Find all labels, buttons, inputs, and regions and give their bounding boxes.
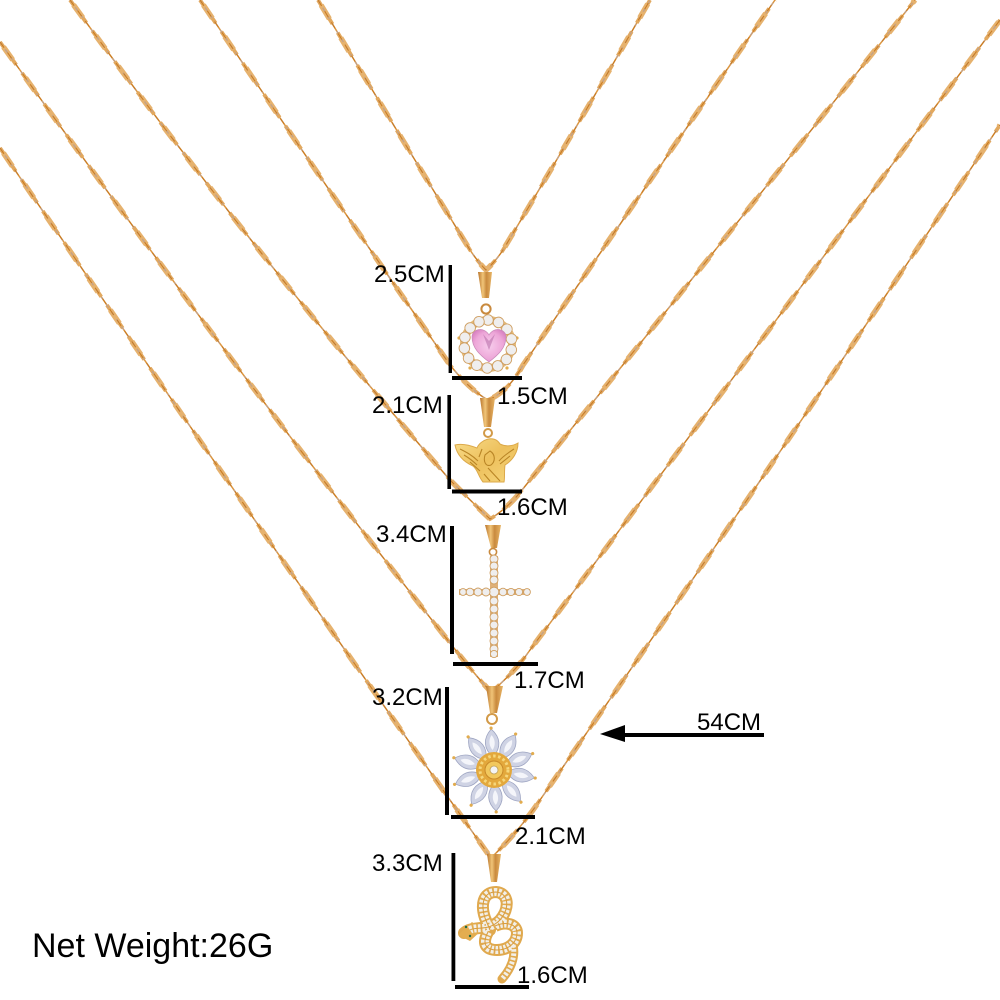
pendant: pink heart with halo bbox=[457, 272, 519, 373]
arrow: chain length 54CM bbox=[600, 709, 764, 742]
dimension: snake height: 3.3CM bbox=[372, 850, 443, 877]
dimension: sunflower height bbox=[372, 684, 449, 815]
dimension: heart height: 2.5CM bbox=[374, 261, 445, 288]
dimension: angel width: 1.6CM bbox=[497, 494, 568, 521]
dimension: heart width bbox=[452, 376, 568, 410]
dimension: angel height: 2.1CM bbox=[372, 392, 443, 419]
dimension: cross height: 3.4CM bbox=[376, 521, 447, 548]
chain 3 bbox=[70, 0, 915, 519]
dimension: sunflower width bbox=[451, 815, 586, 850]
dimension: cross height bbox=[376, 521, 454, 654]
pendant: golden angel bbox=[455, 398, 518, 482]
chain 2 bbox=[200, 0, 775, 400]
pendant: pave snake bbox=[458, 854, 517, 979]
dimension: snake width: 1.6CM bbox=[517, 962, 588, 989]
dimension: snake width bbox=[455, 962, 588, 989]
dimension: cross width: 1.7CM bbox=[514, 667, 585, 694]
dimension: angel height bbox=[372, 392, 451, 489]
dimension: heart width: 1.5CM bbox=[497, 383, 568, 410]
chain 4 bbox=[0, 20, 1000, 692]
net weight label: Net Weight:26G bbox=[32, 927, 273, 965]
pendant: crystal sunflower bbox=[450, 686, 538, 814]
dimension: angel width bbox=[452, 490, 568, 521]
chain 5 (outermost, longest) bbox=[0, 125, 1000, 858]
dimension: sunflower height: 3.2CM bbox=[372, 684, 443, 711]
dimension: heart height bbox=[374, 261, 452, 373]
arrow: chain length 54CM: 54CM bbox=[697, 709, 761, 736]
chain 1 (innermost, shortest) bbox=[318, 0, 650, 270]
dimension: sunflower width: 2.1CM bbox=[515, 823, 586, 850]
pendant: rhinestone cross bbox=[459, 525, 530, 658]
flower petals bbox=[450, 726, 538, 814]
dimension: cross width bbox=[453, 662, 585, 694]
dimension: snake height bbox=[372, 850, 455, 981]
